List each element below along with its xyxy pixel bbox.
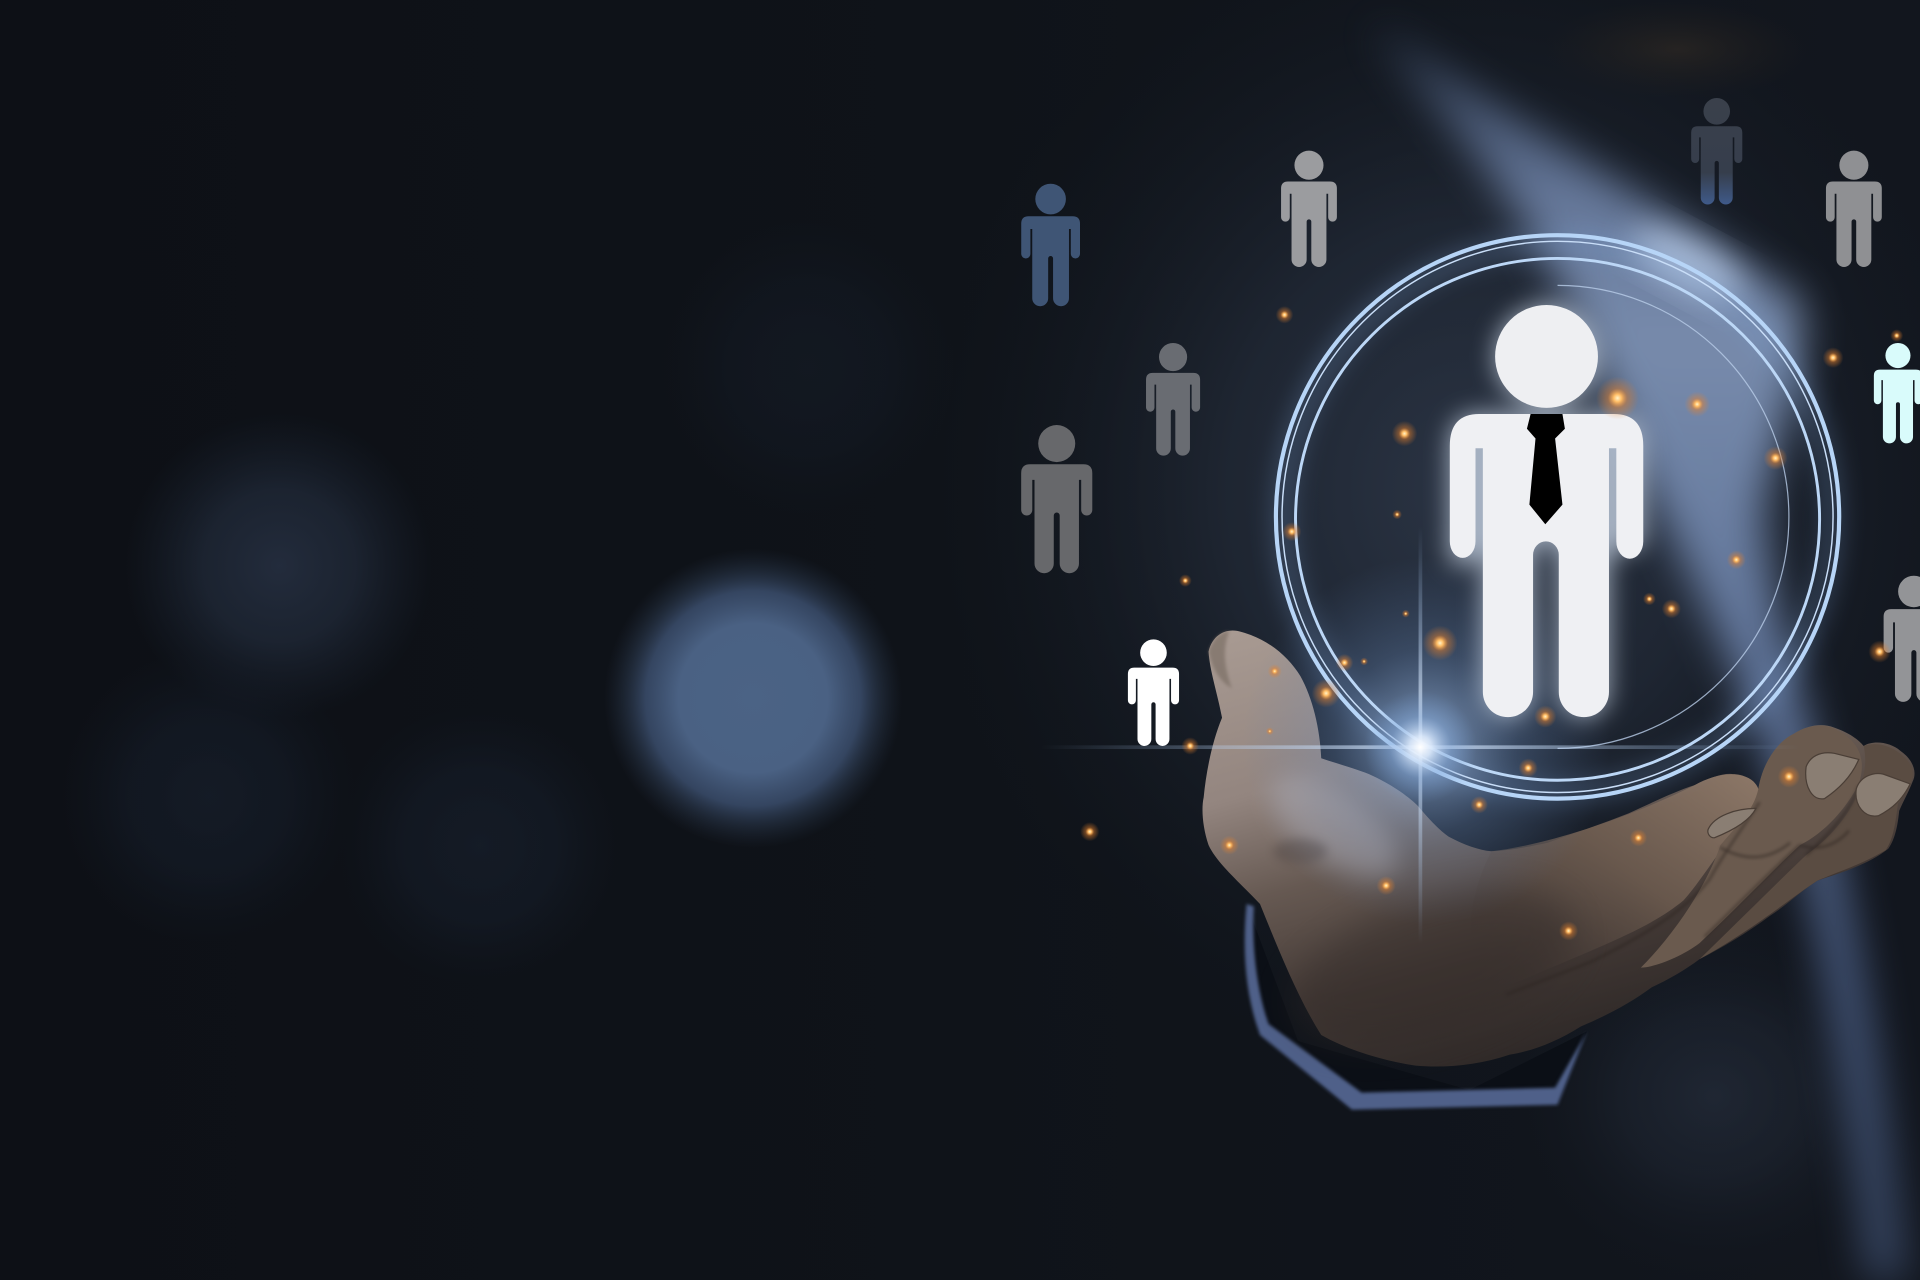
- thumb detail: [1209, 631, 1232, 688]
- body: [1450, 414, 1643, 717]
- person: light grey upper: [1281, 151, 1337, 267]
- hand: [1202, 631, 1915, 1077]
- person: white highlighted: [1128, 639, 1179, 746]
- finger creases: [1506, 786, 1859, 995]
- fingernails: [1708, 753, 1910, 838]
- ring finger: [1700, 744, 1913, 959]
- person: mid grey: [1146, 343, 1200, 456]
- person: cyan highlighted: [1874, 343, 1920, 443]
- crowd icons: [1021, 98, 1920, 746]
- figure glow: [1448, 305, 1643, 717]
- jacket lapel highlight: [1371, 24, 1905, 1280]
- index finger: [1470, 774, 1760, 992]
- orange sparks: [1080, 306, 1903, 940]
- person: grey cropped at right edge: [1884, 576, 1920, 702]
- person: blue grey: [1021, 184, 1080, 306]
- sphere inner glow: [1243, 243, 1832, 925]
- person: large grey: [1021, 425, 1092, 573]
- necktie: [1527, 414, 1565, 524]
- lens flare: [1041, 527, 1800, 943]
- person: grey far right: [1826, 151, 1882, 267]
- person: dark upper right: [1691, 98, 1742, 205]
- head: [1495, 305, 1598, 408]
- bokeh lights: [61, 220, 955, 986]
- main person icon: [1448, 305, 1643, 717]
- cuff: [1245, 904, 1587, 1110]
- suit jacket: [931, 0, 1920, 1280]
- middle finger: [1641, 726, 1862, 968]
- glowing ring: [1276, 235, 1839, 799]
